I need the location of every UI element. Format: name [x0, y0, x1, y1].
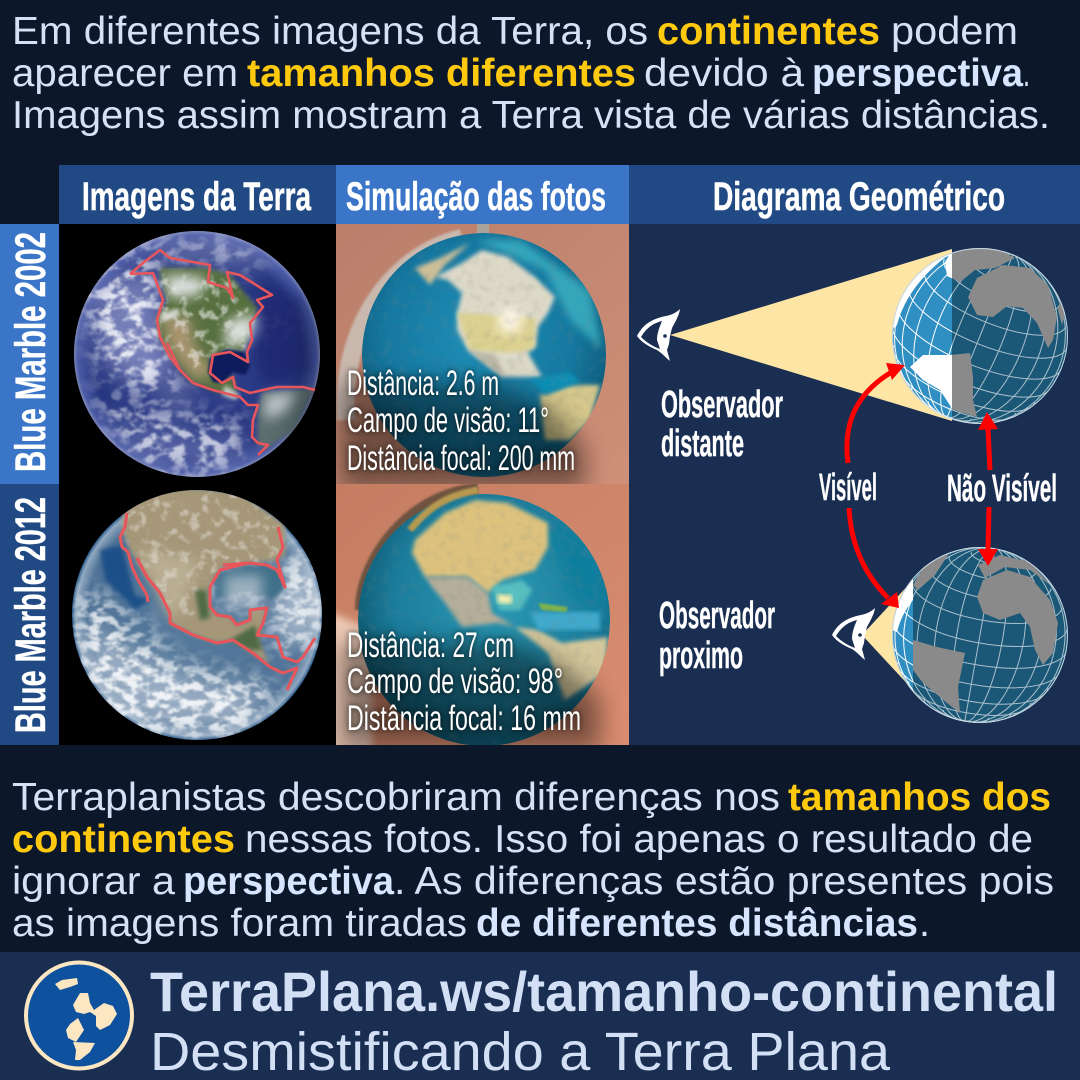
table header: Diagrama Geométrico [629, 165, 1080, 224]
intro text: tamanhos diferentes [247, 52, 636, 95]
photo globe close [358, 494, 610, 746]
image: Blue Marble 2002 earth [74, 231, 330, 477]
image: Blue Marble 2012 earth [72, 487, 322, 740]
label: Observador proximo: Observador [659, 595, 775, 637]
view cone far [670, 249, 952, 421]
conclusion text: perspectiva [183, 860, 394, 903]
globe diagram near [892, 547, 1068, 723]
photo caption far: Distância: 2.6 m [347, 364, 499, 403]
intro text: Imagens assim mostram a Terra vista de várias distâncias. [12, 94, 1050, 137]
intro text: devido à [644, 52, 804, 95]
globe meridian ring [346, 238, 462, 420]
row label: Blue Marble 2012: Blue Marble 2012 [7, 497, 55, 733]
row label: Blue Marble 2002 [0, 224, 59, 484]
label: Observador distante: Observador [661, 384, 783, 426]
conclusion text: . [919, 902, 930, 945]
conclusion text: ignorar a [12, 860, 175, 903]
shadow behind caption [340, 645, 600, 750]
footer url: TerraPlana.ws/tamanho-continental [150, 960, 1058, 1023]
icon: eye near [832, 608, 875, 660]
photo caption close: Distância focal: 16 mm [347, 699, 581, 738]
intro text: perspectiva [812, 52, 1023, 95]
intro text: Em diferentes imagens da Terra, os [12, 10, 648, 53]
label: Observador distante: distante [661, 423, 744, 465]
intro text: aparecer em [12, 52, 238, 95]
conclusion text: de diferentes distâncias [476, 902, 918, 945]
label: Observador proximo [659, 595, 775, 677]
view cone near [862, 580, 913, 690]
conclusion text [12, 776, 1054, 945]
conclusion text: nessas fotos. Isso foi apenas o resultado de [245, 818, 1033, 861]
photo caption close: Campo de visão: 98° [347, 662, 563, 701]
row label: Blue Marble 2012 [0, 484, 59, 745]
shadow behind caption [340, 385, 585, 490]
conclusion text: continentes [12, 818, 235, 861]
arrow: visible lower [849, 508, 899, 608]
footer [0, 952, 1080, 1080]
photo globe far [362, 233, 606, 477]
panel: photo simulation distant [336, 224, 629, 490]
panel: earth images [59, 224, 336, 745]
photo caption close: Distância: 27 cm [347, 626, 514, 665]
photo caption far: Distância focal: 200 mm [347, 439, 575, 478]
continent outline [120, 513, 315, 690]
panel: photo simulation close [330, 484, 629, 750]
icon: eye distant [637, 309, 680, 361]
conclusion text: as imagens foram tiradas [12, 902, 467, 945]
brass ring highlight [410, 490, 478, 530]
table header: Imagens da Terra [59, 165, 336, 224]
photo caption far: Campo de visão: 11° [347, 401, 549, 440]
brass meridian ring [362, 490, 478, 610]
intro text: . [1023, 52, 1030, 95]
conclusion text: Terraplanistas descobriram diferenças nos [12, 776, 780, 819]
icon: flat earth logo [26, 962, 132, 1068]
arrow: not visible upper [978, 412, 998, 470]
label: Observador distante [661, 384, 783, 465]
photo caption far [347, 364, 575, 478]
row label: Blue Marble 2002: Blue Marble 2002 [7, 232, 55, 472]
intro text: continentes [657, 10, 880, 53]
arrow: not visible lower [978, 507, 998, 566]
arrow: visible upper [847, 363, 905, 463]
intro text: podem [891, 10, 1018, 53]
table header: Simulação das fotos [336, 165, 629, 224]
conclusion text: tamanhos dos [788, 776, 1051, 819]
photo caption close [347, 626, 581, 738]
table header: Imagens da Terra: Imagens da Terra [82, 175, 312, 219]
label: Observador proximo: proximo [659, 635, 743, 677]
desk highlight [330, 612, 372, 750]
conclusion text: . As diferenças estão presentes pois [394, 860, 1054, 903]
panel: geometric diagram: Visível [819, 467, 877, 509]
stand pin [477, 224, 489, 234]
intro text [12, 10, 1050, 137]
panel: geometric diagram [629, 221, 1080, 745]
continent outline [130, 250, 315, 455]
globe diagram far [892, 248, 1068, 424]
table header: Simulação das fotos: Simulação das fotos [346, 175, 606, 219]
